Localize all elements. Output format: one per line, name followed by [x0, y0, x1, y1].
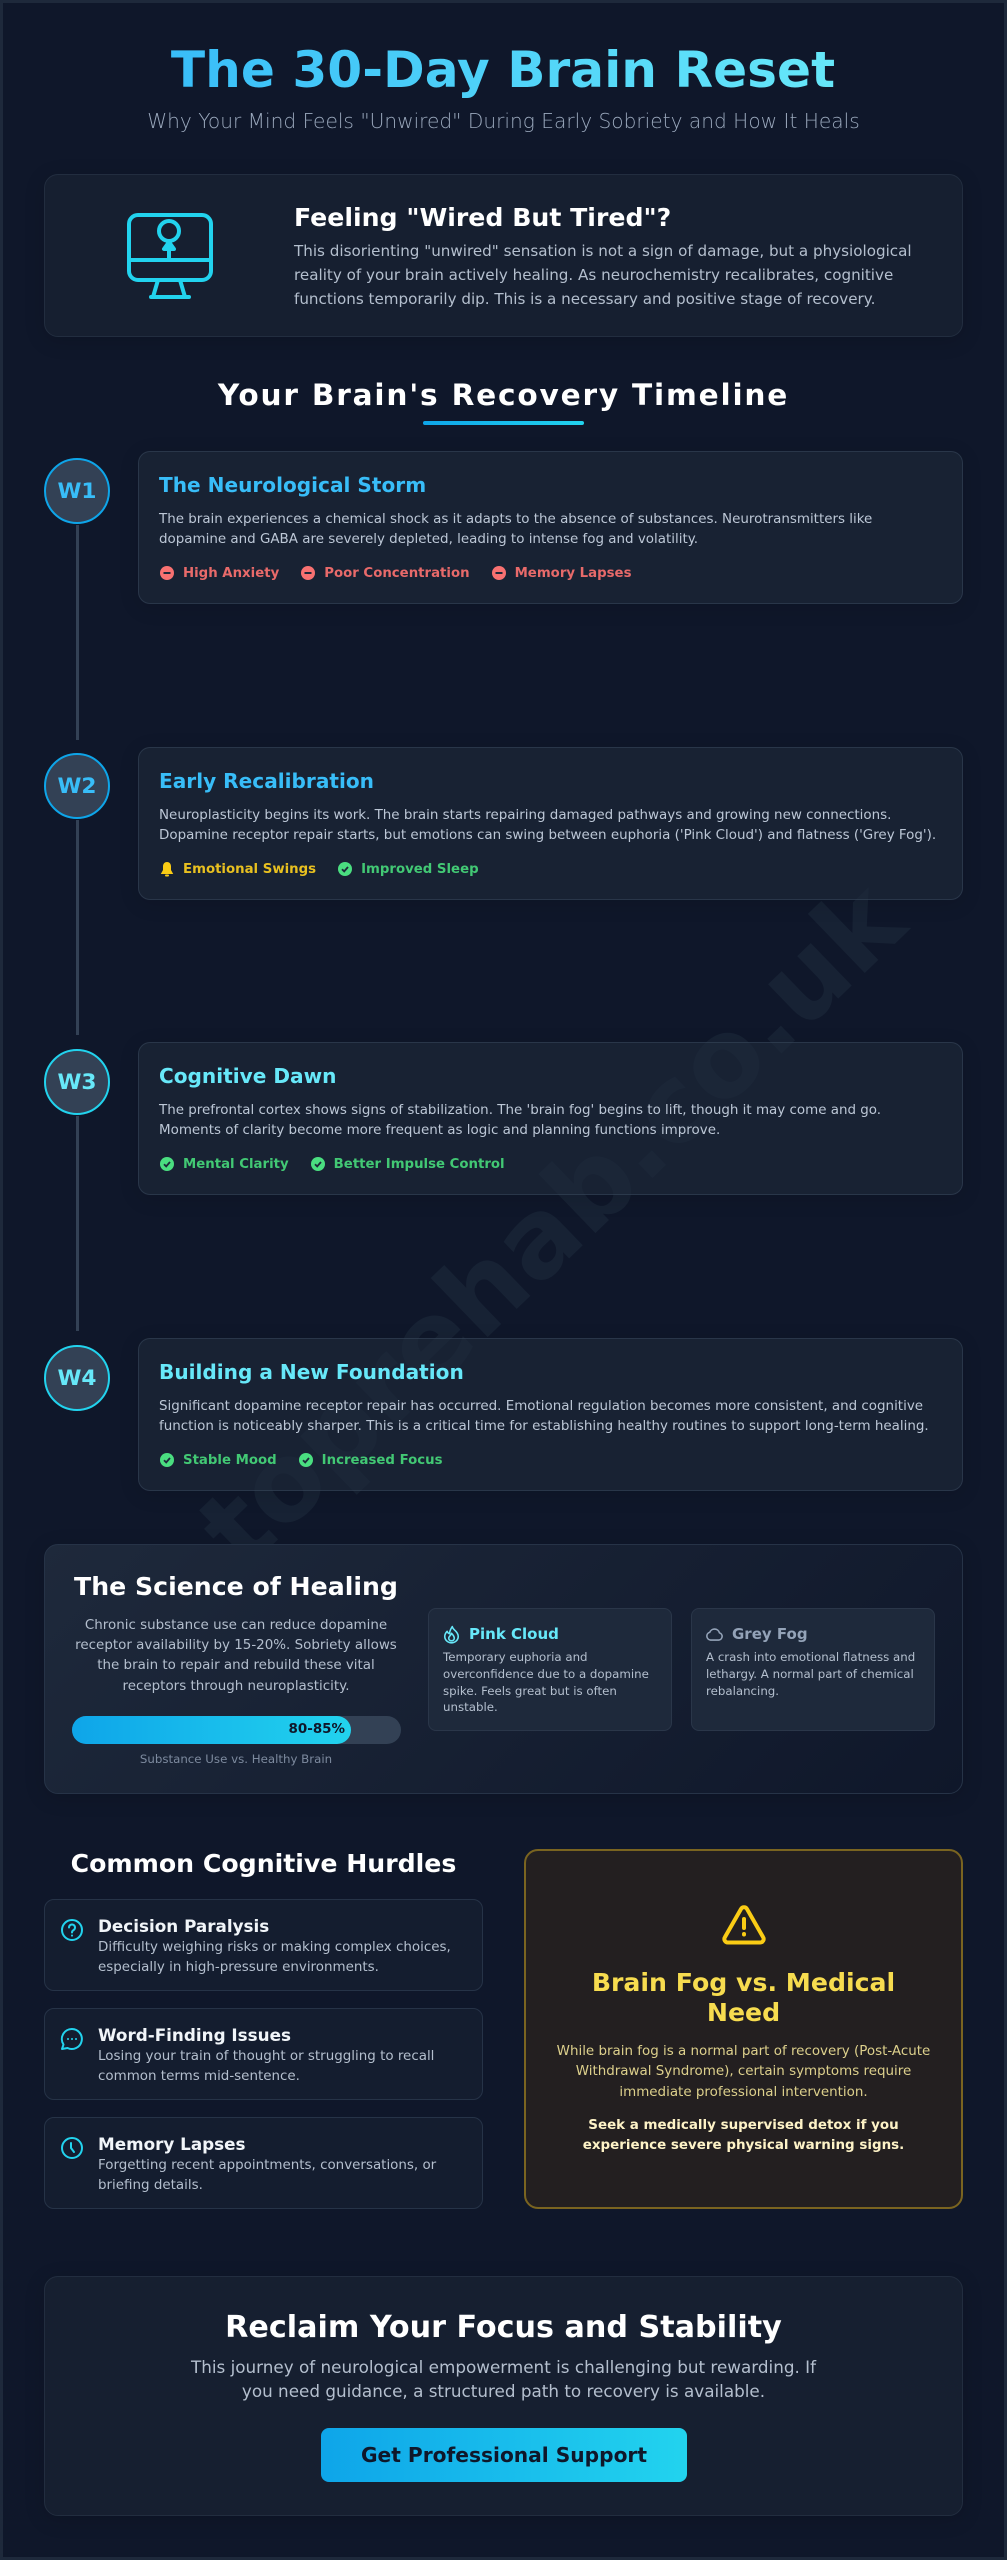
hurdle: word finding	[44, 2008, 483, 2100]
week 1 tags	[160, 566, 631, 581]
hurdle text: briefing details.	[98, 2178, 203, 2193]
icon: chat bubble	[60, 2028, 83, 2050]
heading: cognitive hurdles: Common Cognitive Hurdles	[71, 1849, 456, 1878]
icon: monitor with brain	[127, 213, 213, 299]
icon: question	[61, 1919, 83, 1941]
week 1 tags: Poor Concentration	[324, 566, 470, 581]
week 2 text: Dopamine receptor repair starts, but emotions can swing between euphoria ('Pink Cloud') and flatness ('Grey Fog').	[159, 828, 936, 843]
hurdle heading: Memory Lapses	[98, 2134, 246, 2154]
week 3 heading: Cognitive Dawn	[159, 1064, 336, 1088]
panel: wired but tired	[44, 174, 963, 337]
warning heading	[592, 1968, 895, 2027]
warning emphasis: Seek a medically supervised detox if you	[588, 2118, 899, 2133]
grey fog text: lethargy. A normal part of chemical	[706, 1667, 914, 1681]
week 3 tags	[160, 1157, 505, 1172]
week 2 text: Neuroplasticity begins its work. The brain starts repairing damaged pathways and growing new connections.	[159, 808, 891, 823]
hurdle: memory lapses	[44, 2117, 483, 2209]
watermark: toprehab.co.uk	[175, 858, 928, 1591]
pink cloud heading: Pink Cloud	[469, 1625, 559, 1643]
hurdle heading: Decision Paralysis	[98, 1916, 269, 1936]
card: week 3	[138, 1042, 963, 1195]
hurdle text: common terms mid-sentence.	[98, 2069, 300, 2084]
warning text: While brain fog is a normal part of recovery (Post-Acute	[557, 2044, 930, 2059]
week 2 tags: Emotional Swings	[183, 862, 316, 877]
week 1 text: The brain experiences a chemical shock as it adapts to the absence of substances. Neurotransmitters like	[159, 512, 872, 527]
icon: clock	[61, 2137, 83, 2159]
week 2 text	[159, 808, 936, 843]
progress bar	[72, 1716, 401, 1744]
science text: the brain to repair and rebuild these vital	[97, 1658, 375, 1673]
week 1 heading: The Neurological Storm	[159, 473, 426, 497]
grey fog text: rebalancing.	[706, 1684, 779, 1698]
progress fill: 80-85%	[289, 1722, 345, 1737]
week 4 heading: Building a New Foundation	[159, 1360, 464, 1384]
node: week 2	[44, 753, 110, 819]
cta text: This journey of neurological empowerment is challenging but rewarding. If	[191, 2356, 816, 2376]
week 2 heading: Early Recalibration	[159, 769, 374, 793]
panel: call to action	[44, 2276, 963, 2516]
science text	[75, 1618, 397, 1694]
warning emphasis: experience severe physical warning signs.	[583, 2138, 904, 2153]
card: week 2	[138, 747, 963, 900]
panel: science of healing	[44, 1544, 963, 1794]
icon: cloud	[706, 1628, 723, 1641]
week 1 tags: High Anxiety	[183, 566, 279, 581]
node: week 3: W3	[57, 1070, 96, 1095]
cta button: Get Professional Support	[361, 2443, 647, 2467]
grey fog heading: Grey Fog	[732, 1625, 808, 1643]
hurdle text: Difficulty weighing risks or making complex choices,	[98, 1940, 451, 1955]
grey fog text: A crash into emotional flatness and	[706, 1650, 915, 1664]
node: week 4: W4	[57, 1366, 96, 1391]
hurdle heading: Word-Finding Issues	[98, 2025, 291, 2045]
week 4 text: function is noticeably sharper. This is a critical time for establishing healthy routines to support long-term healing.	[159, 1419, 929, 1434]
body text: This disorienting "unwired" sensation is not a sign of damage, but a physiological	[294, 242, 912, 260]
connector: week 2 to 3	[76, 820, 79, 1035]
hurdle: decision paralysis	[44, 1899, 483, 1991]
node: week 2: W2	[57, 774, 96, 799]
week 1 tags: Memory Lapses	[515, 566, 631, 581]
science text: receptors through neuroplasticity.	[122, 1679, 350, 1694]
pink cloud text: unstable.	[443, 1700, 498, 1714]
hurdle text	[98, 2049, 434, 2084]
card: week 1	[138, 451, 963, 604]
warning heading: Brain Fog vs. Medical	[592, 1968, 895, 1997]
week 3 text	[158, 1103, 881, 1138]
node: week 1	[44, 458, 110, 524]
panel: medical warning	[524, 1849, 963, 2209]
week 4 text: Significant dopamine receptor repair has occurred. Emotional regulation becomes more consistent, and cognitive	[159, 1399, 923, 1414]
node: week 4	[44, 1345, 110, 1411]
card: grey fog	[691, 1608, 935, 1731]
body text	[294, 242, 912, 308]
warning heading: Need	[707, 1998, 780, 2027]
subtitle: Why Your Mind Feels "Unwired" During Early Sobriety and How It Heals	[147, 109, 860, 133]
warning text: Withdrawal Syndrome), certain symptoms require	[576, 2064, 911, 2079]
icon: warning triangle	[722, 1905, 766, 1944]
connector: week 3 to 4	[76, 1116, 79, 1331]
science heading: The Science of Healing	[74, 1572, 398, 1601]
warning text	[557, 2044, 930, 2100]
node: week 1: W1	[57, 479, 96, 504]
section heading: timeline: Your Brain's Recovery Timeline	[218, 378, 789, 412]
week 3 text: Moments of clarity become more frequent as logic and planning functions improve.	[159, 1123, 720, 1138]
pink cloud text	[442, 1650, 649, 1714]
connector: week 1 to 2	[76, 525, 79, 740]
hurdle text: Forgetting recent appointments, conversations, or	[98, 2158, 436, 2173]
week 2 tags: Improved Sleep	[361, 862, 479, 877]
pink cloud text: overconfidence due to a dopamine	[443, 1667, 649, 1681]
cta button	[321, 2428, 687, 2482]
hurdle text: Losing your train of thought or struggling to recall	[98, 2049, 434, 2064]
week 3 tags: Mental Clarity	[183, 1157, 289, 1172]
week 1 text	[158, 512, 872, 547]
cta heading: Reclaim Your Focus and Stability	[225, 2310, 782, 2345]
title: The 30-Day Brain Reset	[171, 40, 835, 99]
heading underline	[423, 421, 584, 425]
week 3 tags: Better Impulse Control	[334, 1157, 505, 1172]
progress fill	[72, 1716, 351, 1744]
hurdle text	[98, 1940, 451, 1975]
cta text	[190, 2356, 816, 2400]
hurdle text	[98, 2158, 436, 2193]
week 1 text: dopamine and GABA are severely depleted, leading to intense fog and volatility.	[159, 532, 698, 547]
pink cloud text: Temporary euphoria and	[443, 1650, 588, 1664]
warning emphasis	[583, 2118, 904, 2153]
science text: receptor availability by 15-20%. Sobriety allows	[75, 1638, 397, 1653]
week 4 tags: Stable Mood	[183, 1453, 277, 1468]
week 3 text: The prefrontal cortex shows signs of stabilization. The 'brain fog' begins to lift, though it may come and go.	[159, 1103, 881, 1118]
warning text: immediate professional intervention.	[619, 2085, 868, 2100]
heading: Feeling "Wired But Tired"?	[294, 203, 671, 232]
body text: functions temporarily dip. This is a necessary and positive stage of recovery.	[294, 290, 875, 308]
body text: reality of your brain actively healing. As neurochemistry recalibrates, cognitive	[294, 266, 893, 284]
card: pink cloud	[428, 1608, 672, 1731]
week 4 text	[159, 1399, 929, 1434]
grey fog text	[706, 1650, 915, 1698]
node: week 3	[44, 1049, 110, 1115]
card: week 4	[138, 1338, 963, 1491]
cta text: you need guidance, a structured path to recovery is available.	[242, 2380, 765, 2400]
hurdle text: especially in high-pressure environments.	[98, 1960, 379, 1975]
progress caption: Substance Use vs. Healthy Brain	[140, 1752, 332, 1766]
icon: flame	[444, 1626, 459, 1644]
science text: Chronic substance use can reduce dopamine	[85, 1618, 387, 1633]
week 4 tags: Increased Focus	[322, 1453, 443, 1468]
week 4 tags	[160, 1453, 443, 1468]
pink cloud text: spike. Feels great but is often	[443, 1684, 617, 1698]
week 2 tags	[160, 862, 479, 877]
